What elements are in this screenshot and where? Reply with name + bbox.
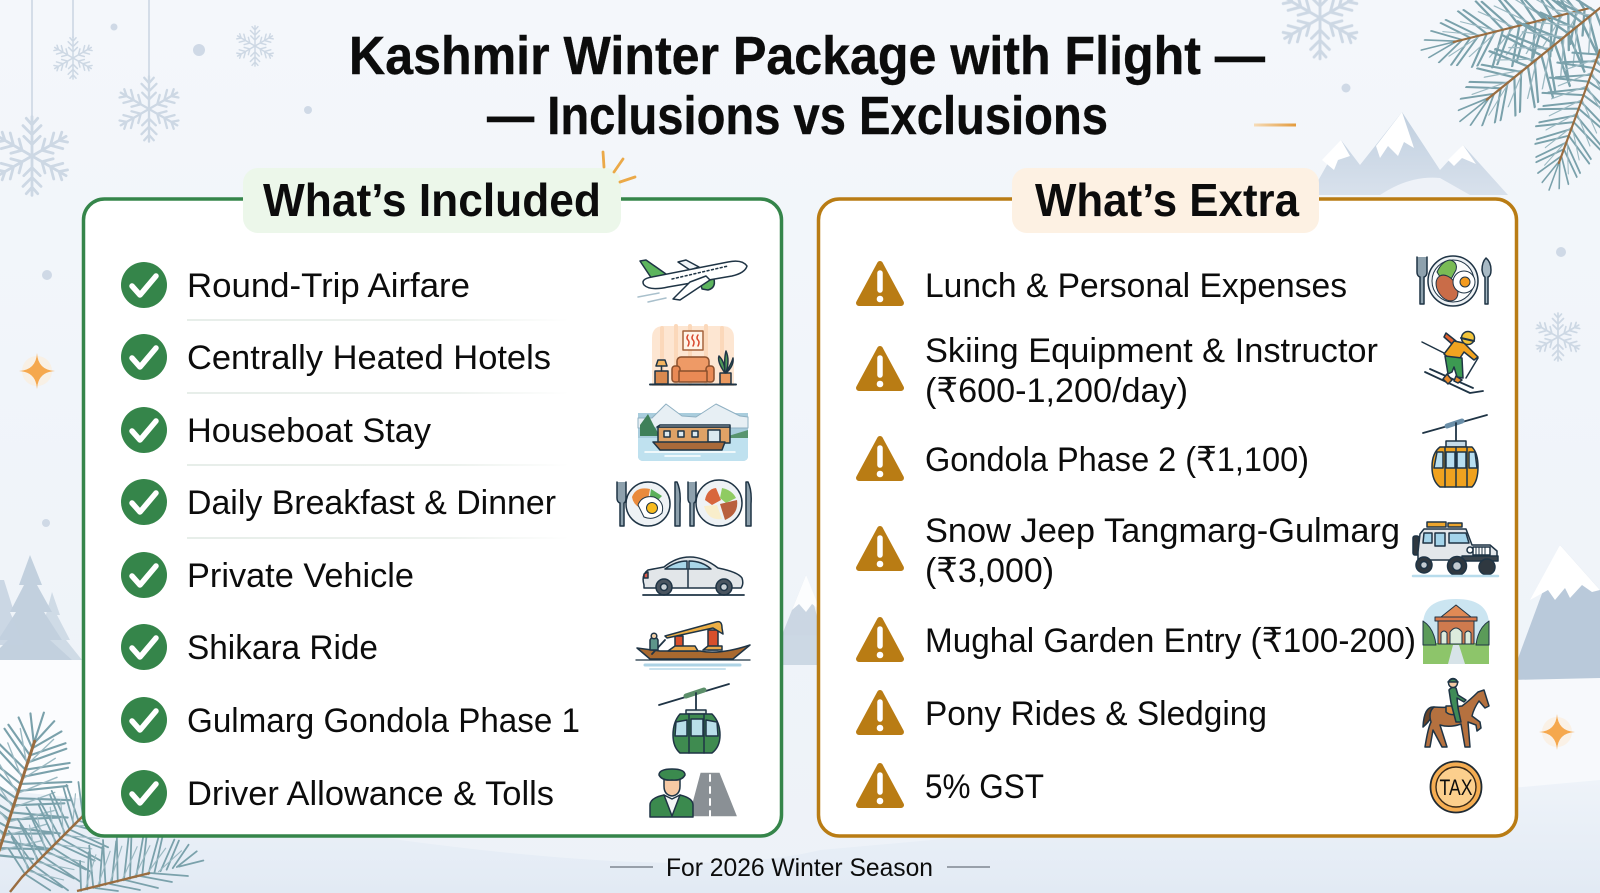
background mountains top right	[1310, 112, 1508, 195]
item: gulmarg gondola phase 1: Gulmarg Gondola Phase 1	[187, 702, 580, 740]
item: snow jeep tangmarg-gulmarg	[859, 512, 1400, 590]
accent ticks	[603, 152, 635, 182]
item: houseboat stay	[121, 407, 432, 453]
item: skiing equipment and instructor	[859, 332, 1378, 410]
item: private vehicle: Private Vehicle	[187, 557, 414, 595]
heading: what's extra: What’s Extra	[1035, 174, 1299, 226]
orange dash	[1254, 124, 1296, 126]
item: daily breakfast and dinner	[121, 479, 556, 525]
sparkle right	[1539, 714, 1575, 750]
item: driver allowance and tolls	[121, 770, 554, 816]
item: gondola phase 2: Gondola Phase 2 (₹1,100)	[925, 441, 1309, 479]
item: snow jeep tangmarg-gulmarg: (₹3,000)	[925, 552, 1054, 590]
item: houseboat stay: Houseboat Stay	[187, 412, 432, 450]
item: round-trip airfare: Round-Trip Airfare	[187, 267, 470, 305]
title: — Inclusions vs Exclusions	[487, 86, 1108, 146]
icon: car	[643, 557, 744, 595]
sparkle left	[19, 353, 55, 389]
footer: For 2026 Winter Season	[666, 854, 933, 882]
background mountains right	[1510, 545, 1600, 680]
item: lunch and personal expenses: Lunch & Personal Expenses	[925, 267, 1347, 305]
item: driver allowance and tolls: Driver Allowance & Tolls	[187, 775, 554, 813]
panel: what's included	[84, 152, 782, 836]
item: 5% gst: 5% GST	[925, 768, 1044, 806]
icon: orange gondola	[1423, 415, 1487, 487]
panel: what's extra	[818, 168, 1516, 836]
item: private vehicle	[121, 552, 414, 598]
item: mughal garden entry: Mughal Garden Entry (₹100-200)	[925, 622, 1416, 660]
item: daily breakfast and dinner: Daily Breakfast & Dinner	[187, 484, 556, 522]
item: shikara ride	[121, 624, 378, 670]
icon: mughal garden	[1423, 599, 1489, 664]
item: snow jeep tangmarg-gulmarg: Snow Jeep Tangmarg-Gulmarg	[925, 512, 1400, 550]
icon: tax coin: TAX	[1440, 775, 1473, 800]
background trees left	[0, 555, 82, 660]
icon: houseboat	[638, 404, 748, 461]
item: 5% gst	[859, 766, 1044, 806]
snowflakes	[0, 0, 1582, 361]
icon: two plates with cutlery	[617, 480, 751, 526]
icon: horse rider	[1423, 678, 1489, 747]
pine branch top right	[1412, 0, 1600, 203]
icon: airplane	[638, 260, 747, 302]
item: pony rides and sledging: Pony Rides & Sledging	[925, 695, 1267, 733]
icon: snow jeep	[1413, 522, 1498, 576]
item: skiing equipment and instructor: Skiing Equipment & Instructor	[925, 332, 1378, 370]
item: gulmarg gondola phase 1	[121, 697, 580, 743]
snow dots	[42, 24, 1566, 527]
icon: green gondola	[659, 684, 729, 753]
title: Kashmir Winter Package with Flight —	[349, 26, 1265, 86]
icon: heated hotel room	[650, 326, 736, 386]
title	[349, 26, 1265, 146]
snow ground	[0, 660, 1600, 893]
item: centrally heated hotels: Centrally Heated Hotels	[187, 339, 551, 377]
icon: skier	[1422, 332, 1483, 393]
background mountain between panels	[770, 575, 830, 665]
heading: what's included: What’s Included	[263, 174, 601, 226]
item: shikara ride: Shikara Ride	[187, 629, 378, 667]
icon: shikara boat	[636, 622, 750, 669]
item: round-trip airfare	[121, 262, 470, 308]
icon: driver and road	[650, 769, 738, 817]
item: centrally heated hotels	[121, 334, 551, 380]
item: skiing equipment and instructor: (₹600-1,200/day)	[925, 372, 1188, 410]
pine branch bottom left	[0, 696, 203, 893]
icon: plate with meal	[1417, 256, 1491, 306]
icon: tax coin	[1430, 762, 1482, 812]
